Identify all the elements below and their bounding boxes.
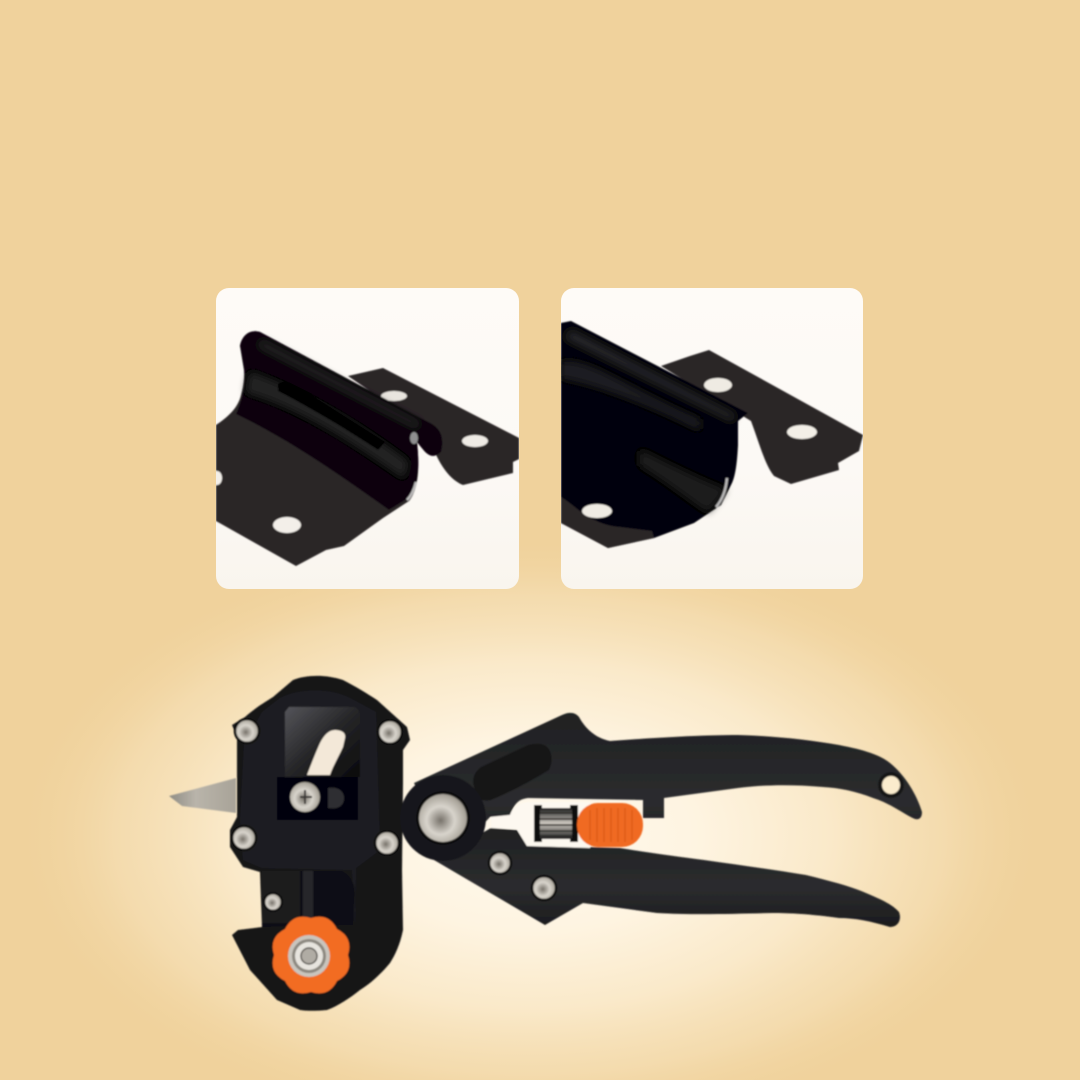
head body: [230, 676, 410, 1011]
lower face: [561, 497, 654, 548]
front blade face: [216, 331, 442, 566]
black tube band: [236, 331, 442, 510]
upper handle: [414, 713, 922, 860]
ridge sheen: [565, 330, 735, 421]
infographic canvas: [82, 288, 979, 1080]
curl highlight: [716, 478, 727, 507]
head face raised area: [240, 690, 380, 930]
orange knob: [273, 917, 349, 993]
window screw: [290, 782, 320, 812]
upper wall sheen: [561, 362, 700, 430]
lock slider: [577, 803, 643, 847]
handle slot: [473, 744, 552, 801]
lower head opening: [262, 871, 355, 927]
head screws: [232, 719, 556, 911]
slot: [278, 382, 385, 450]
back flange: [348, 368, 519, 485]
panel: left blade detail photo: [212, 288, 519, 589]
lower wall sheen: [640, 450, 726, 512]
hanging hole: [878, 772, 904, 798]
lower window: [277, 777, 358, 820]
icon: grafting pruner tool: [169, 676, 922, 1011]
back flange: [661, 350, 863, 484]
holes: [273, 517, 301, 533]
spring: [534, 805, 578, 842]
cutting blade: [169, 778, 236, 813]
window slot: [307, 730, 345, 775]
wall sheen: [246, 372, 408, 478]
edge highlight: [407, 482, 416, 500]
knob bolt: [288, 935, 330, 977]
background glow: [0, 530, 1080, 1080]
tube ridge sheen: [258, 340, 420, 428]
spring gap: [491, 802, 590, 848]
panel: right blade detail photo: [561, 288, 863, 589]
blade window: [285, 707, 360, 777]
lower handle: [434, 828, 900, 927]
tube end highlight: [410, 432, 418, 444]
front blade: [561, 321, 748, 548]
pivot: [400, 775, 486, 861]
